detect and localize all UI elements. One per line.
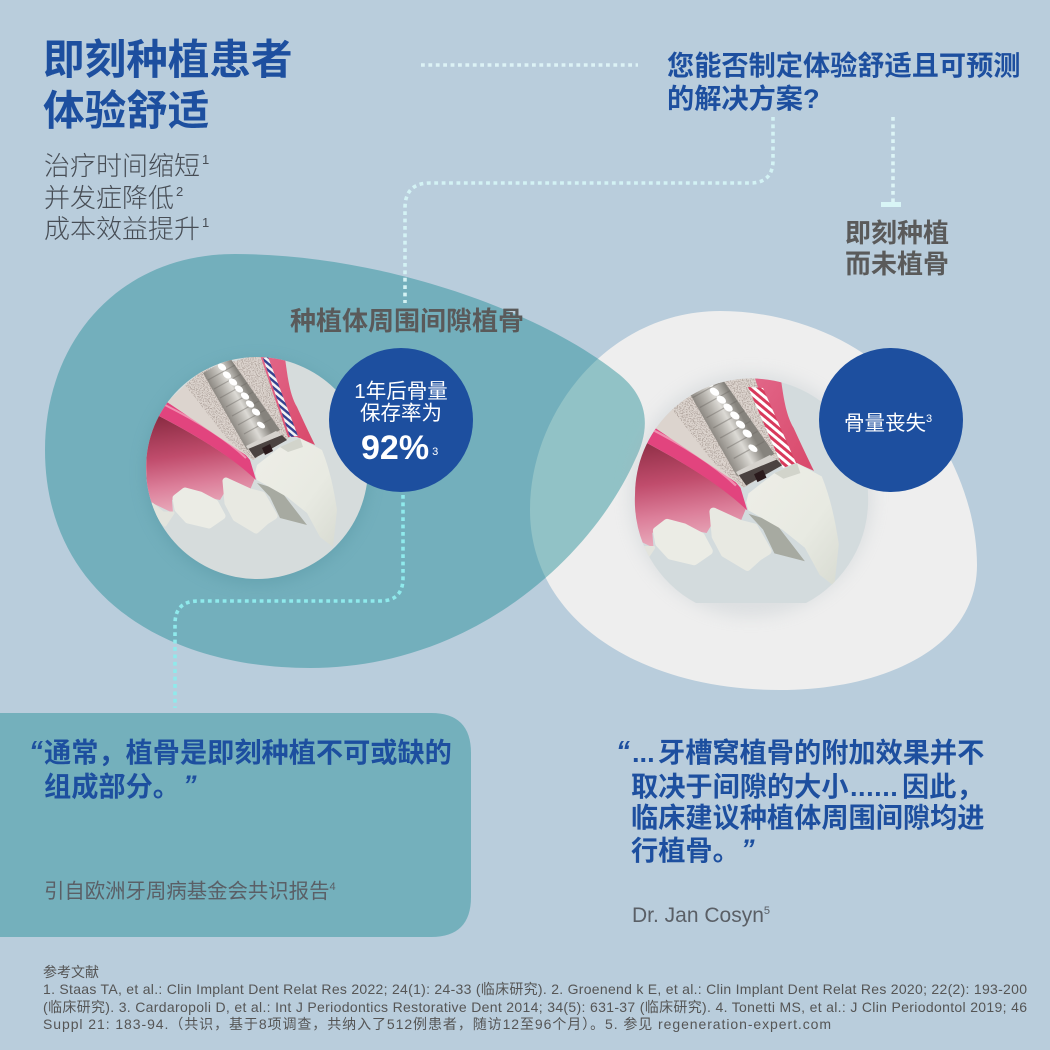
- badge: 92% bone preservation: 92%: [361, 429, 429, 467]
- panel: consensus quote: 通常，植骨是即刻种植不可或缺的: [44, 737, 452, 768]
- badge: 92% bone preservation: 3: [432, 446, 438, 458]
- panel: consensus quote: [0, 713, 471, 937]
- question heading: 的解决方案?: [667, 83, 820, 114]
- references: Suppl 21: 183-94.（共识，基于8项调查，共纳入了512例患者，随访12至96个月）。5. 参见 regeneration-expert.com: [43, 1016, 831, 1032]
- quote: Dr. Jan Cosyn: Dr. Jan Cosyn: [632, 904, 764, 927]
- references: 参考文献: [43, 964, 99, 980]
- label: immediate placement without graft: 而未植骨: [845, 249, 949, 279]
- benefits list: 治疗时间缩短: [44, 151, 200, 181]
- shape: white blob: [530, 311, 977, 690]
- panel: consensus quote: “: [29, 735, 43, 766]
- shape: teal blob: [45, 254, 645, 668]
- dotted connector: badge to quote: [175, 495, 403, 708]
- badge: bone loss: 骨量丧失: [844, 412, 926, 435]
- quote: Dr. Jan Cosyn: ...: [632, 737, 655, 768]
- quote: Dr. Jan Cosyn: ”: [741, 833, 755, 864]
- quote: Dr. Jan Cosyn: 取决于间隙的大小: [631, 771, 849, 802]
- benefits list: 2: [176, 184, 183, 199]
- question heading: 您能否制定体验舒适且可预测: [667, 50, 1020, 81]
- quote: Dr. Jan Cosyn: 行植骨。: [631, 835, 740, 866]
- dotted connector: title to question: [421, 63, 638, 67]
- panel: consensus quote: ”: [183, 769, 197, 800]
- quote: Dr. Jan Cosyn: ......: [850, 771, 898, 802]
- benefits list: 1: [202, 152, 209, 167]
- question heading: [667, 50, 1020, 114]
- quote: Dr. Jan Cosyn: 临床建议种植体周围间隙均进: [631, 802, 984, 833]
- label: immediate placement without graft: 即刻种植: [845, 218, 949, 248]
- panel: consensus quote: 引自欧洲牙周病基金会共识报告: [44, 881, 329, 903]
- illustration: implant with graft: [145, 353, 369, 584]
- title: 体验舒适: [43, 87, 209, 134]
- dotted connector: question to no graft: [881, 117, 901, 207]
- badge: 92% bone preservation: 保存率为: [360, 402, 442, 425]
- quote: Dr. Jan Cosyn: 5: [764, 905, 770, 917]
- badge: bone loss: [819, 348, 963, 492]
- title: [43, 36, 293, 134]
- quote: Dr. Jan Cosyn: 因此，: [902, 771, 984, 802]
- badge: 92% bone preservation: [329, 348, 473, 492]
- panel: consensus quote: 组成部分。: [44, 771, 180, 802]
- references: [43, 964, 1027, 1032]
- dotted connector: question to grafting: [405, 117, 773, 303]
- quote: Dr. Jan Cosyn: “: [616, 735, 630, 766]
- badge: bone loss: 3: [926, 413, 932, 425]
- panel: consensus quote: 4: [329, 881, 336, 893]
- illustration: implant without graft: [623, 367, 873, 617]
- label: immediate placement without graft: [845, 218, 949, 279]
- benefits list: 成本效益提升: [44, 214, 200, 244]
- heading: peri-implant gap grafting: 种植体周围间隙植骨: [290, 306, 524, 336]
- quote: Dr. Jan Cosyn: 牙槽窝植骨的附加效果并不: [658, 737, 984, 768]
- quote: Dr. Jan Cosyn: [616, 735, 984, 927]
- benefits list: [44, 151, 209, 244]
- badge: 92% bone preservation: 1年后骨量: [354, 380, 448, 403]
- references: 1. Staas TA, et al.: Clin Implant Dent Relat Res 2022; 24(1): 24-33 (临床研究). 2. Groenend k E, et al.: Clin Implant Dent Relat Res 2020; 22(2): 193-200: [43, 981, 1027, 997]
- benefits list: 并发症降低: [44, 183, 174, 213]
- benefits list: 1: [202, 215, 209, 230]
- references: (临床研究). 3. Cardaropoli D, et al.: Int J Periodontics Restorative Dent 2014; 34(5): 631-37 (临床研究). 4. Tonetti MS, et al.: J Clin Periodontol 2019; 46: [43, 999, 1027, 1015]
- title: 即刻种植患者: [43, 36, 293, 83]
